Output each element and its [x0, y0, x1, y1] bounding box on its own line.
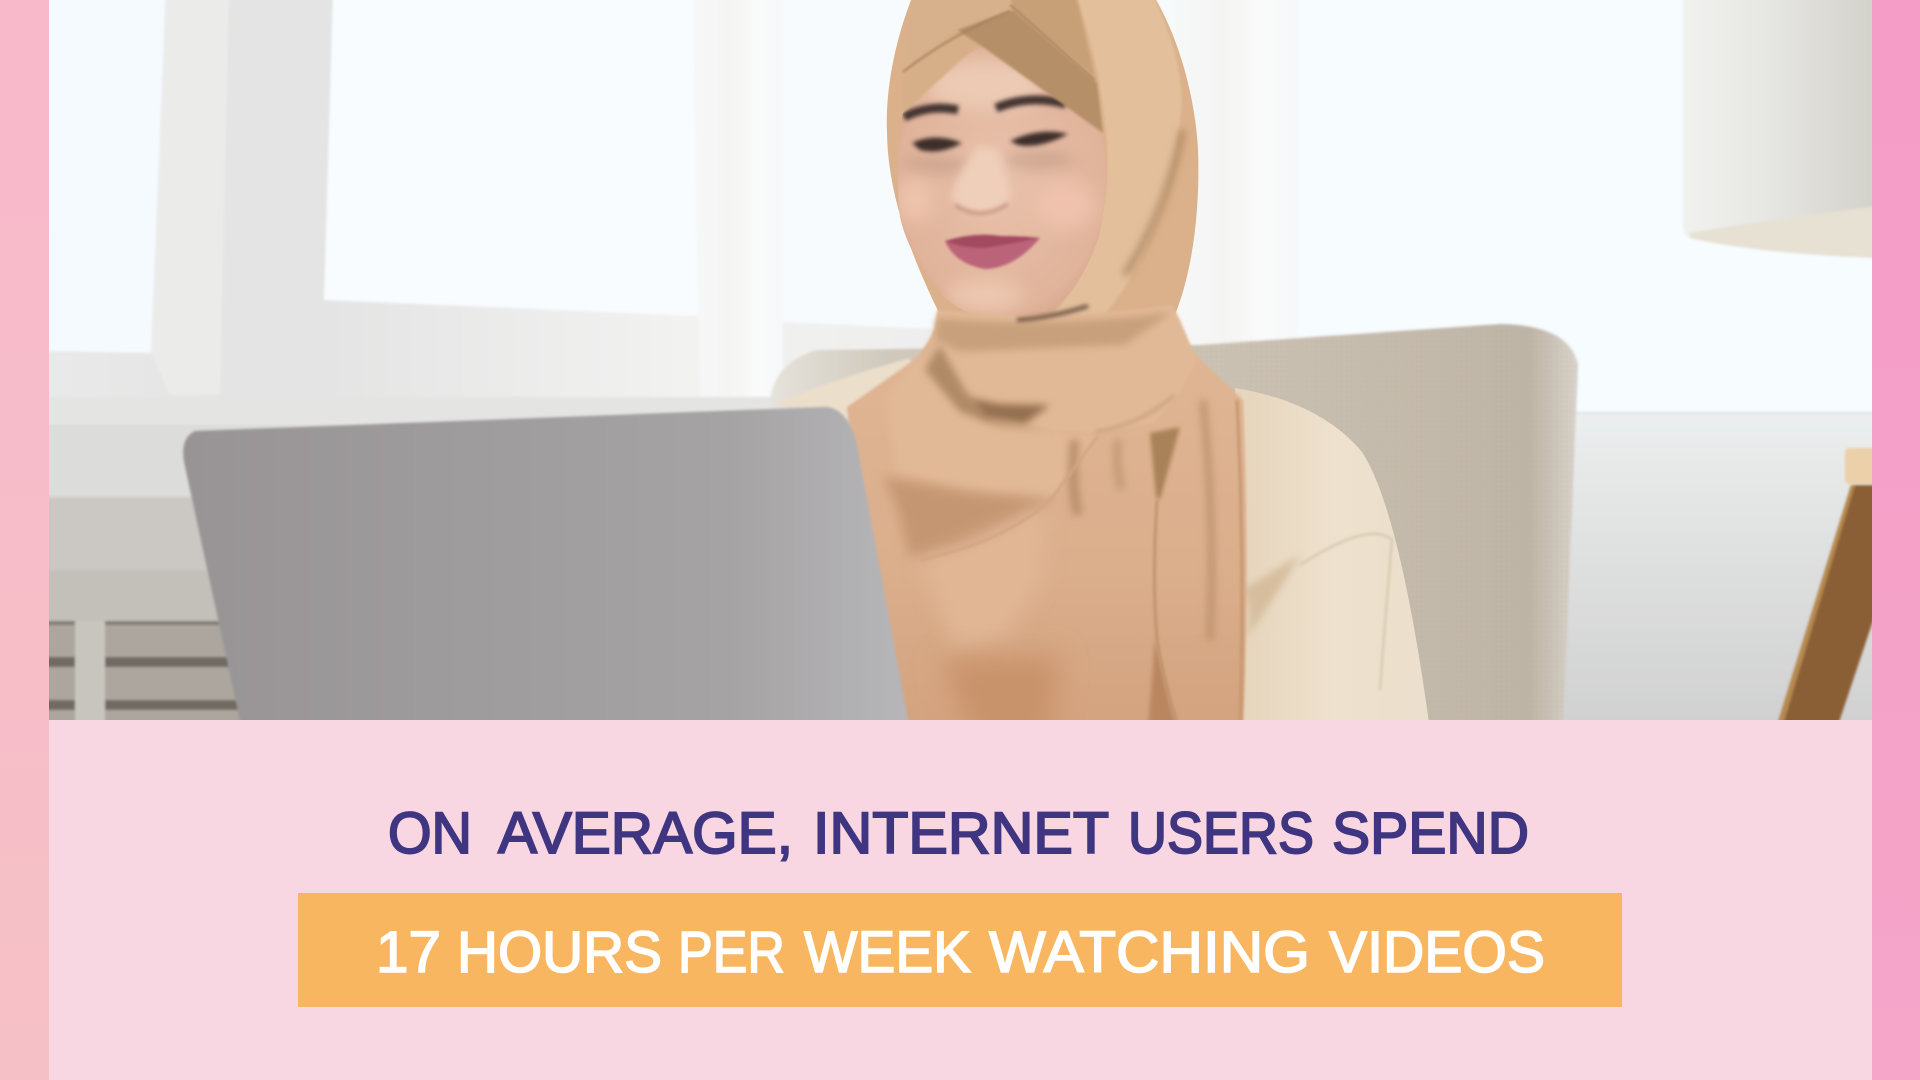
brows	[904, 100, 1066, 117]
scarf drape	[847, 330, 1246, 760]
left pink band	[0, 0, 49, 1080]
laptop	[183, 407, 910, 730]
heading line: SPEND	[1332, 801, 1529, 866]
nose	[951, 145, 1010, 214]
banner text: VIDEOS	[1329, 920, 1545, 985]
heading line: AVERAGE,	[498, 801, 793, 866]
banner text: PER	[678, 920, 785, 985]
eyes	[912, 132, 1068, 151]
hijab hood	[887, 0, 1198, 325]
armchair	[770, 324, 1578, 730]
right pink band	[1872, 0, 1920, 1080]
face	[898, 48, 1106, 314]
lamp shade	[1683, 0, 1880, 258]
photo: woman with laptop	[40, 0, 1888, 760]
banner text: WEEK	[804, 920, 971, 985]
hijab under-cap	[902, 0, 1103, 133]
room background	[40, 0, 1888, 731]
scarf neck wrap	[925, 305, 1197, 433]
lips	[945, 235, 1040, 269]
banner text: WATCHING	[989, 920, 1310, 985]
sweater	[777, 358, 1430, 730]
heading line: ON	[388, 801, 472, 866]
scarf folds	[884, 360, 1244, 720]
bottom panel	[49, 720, 1872, 1080]
banner text: 17	[376, 920, 441, 985]
banner background	[298, 893, 1622, 1007]
face shading	[897, 60, 1095, 311]
heading line: INTERNET	[813, 801, 1109, 866]
highlight banner	[298, 893, 1622, 1007]
heading line: USERS	[1128, 801, 1314, 866]
lamp stand	[1777, 448, 1880, 725]
banner text: HOURS	[457, 920, 662, 985]
